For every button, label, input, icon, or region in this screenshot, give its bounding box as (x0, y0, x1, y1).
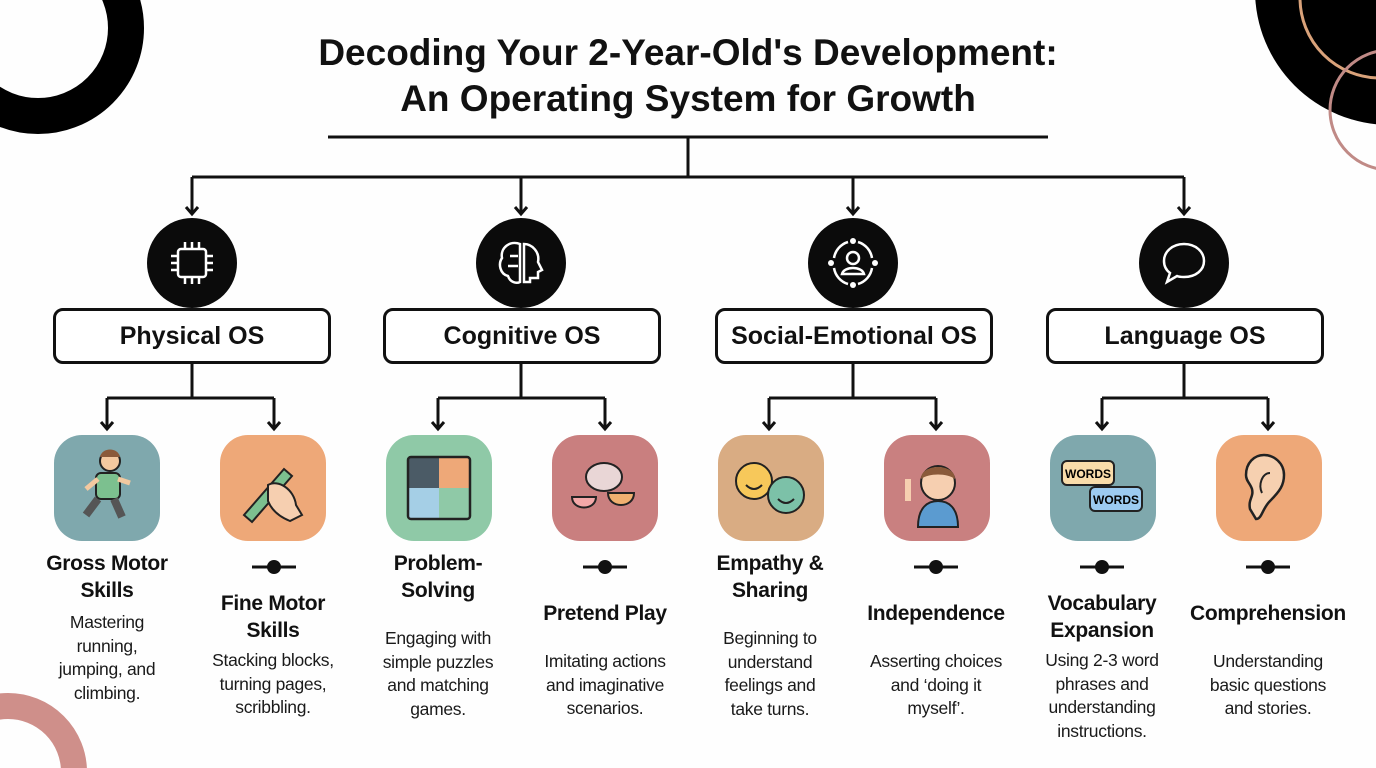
icon: speech bubble (1139, 218, 1229, 308)
card: words: WORDS (1065, 467, 1111, 481)
text: problem solving: Solving (401, 579, 475, 602)
box: Social-Emotional OS (715, 308, 993, 364)
text: independence: myself’. (907, 698, 965, 718)
text: independence: Independence (867, 602, 1005, 625)
text: comprehension (1190, 602, 1346, 718)
text: fine motor (212, 592, 334, 717)
text: problem solving: Problem- (394, 552, 482, 575)
text: empathy: understand (728, 652, 812, 672)
card: ear (1216, 435, 1322, 541)
text: gross motor: Mastering (70, 612, 144, 632)
text: vocabulary: Using 2-3 word (1045, 650, 1159, 670)
text: empathy: Empathy & (716, 552, 824, 575)
box: Physical OS (53, 308, 331, 364)
text: gross motor: climbing. (74, 682, 140, 702)
text: pretend play (543, 602, 667, 718)
text: vocabulary: understanding (1048, 697, 1156, 717)
text: fine motor: Fine Motor (221, 592, 325, 615)
text: gross motor: jumping, and (59, 659, 155, 679)
text: comprehension: basic questions (1210, 674, 1326, 694)
text: gross motor: Gross Motor (46, 552, 168, 575)
text: vocabulary: Vocabulary (1048, 592, 1156, 615)
text: pretend play: scenarios. (567, 698, 643, 718)
card: puzzle (386, 435, 492, 541)
card: fine motor (220, 435, 326, 541)
card: tea set (552, 435, 658, 541)
text: fine motor: turning pages, (220, 674, 326, 694)
text: comprehension: and stories. (1225, 698, 1311, 718)
text: problem solving (383, 552, 493, 718)
title: An Operating System for Growth (400, 78, 976, 119)
text: fine motor: Skills (246, 619, 300, 642)
icon: brain (476, 218, 566, 308)
box: Social-Emotional OS: Social-Emotional OS (731, 322, 977, 350)
text: fine motor: scribbling. (235, 697, 311, 717)
text: vocabulary: Expansion (1050, 619, 1154, 642)
card: empathy (718, 435, 824, 541)
box: Cognitive OS: Cognitive OS (444, 322, 600, 350)
text: gross motor: Skills (80, 579, 134, 602)
title: Decoding Your 2-Year-Old's Development: (318, 32, 1058, 73)
text: empathy: Beginning to (723, 628, 817, 648)
text: comprehension: Comprehension (1190, 602, 1346, 625)
text: pretend play: and imaginative (546, 674, 664, 694)
text: problem solving: Engaging with (385, 628, 491, 648)
card: words: WORDS (1093, 493, 1139, 507)
text: gross motor (46, 552, 168, 702)
text: problem solving: and matching (387, 675, 489, 695)
icon: chip (147, 218, 237, 308)
text: gross motor: running, (77, 636, 137, 656)
text: vocabulary: instructions. (1057, 720, 1147, 740)
text: problem solving: simple puzzles (383, 652, 493, 672)
text: empathy (716, 552, 824, 718)
box: Cognitive OS (383, 308, 661, 364)
text: vocabulary: phrases and (1055, 674, 1149, 694)
text: empathy: feelings and (725, 675, 815, 695)
text: independence: and ‘doing it (891, 674, 981, 694)
text: fine motor: Stacking blocks, (212, 650, 334, 670)
text: pretend play: Imitating actions (544, 651, 666, 671)
text: pretend play: Pretend Play (543, 602, 667, 625)
text: vocabulary (1045, 592, 1159, 740)
text: problem solving: games. (410, 698, 466, 718)
box: Language OS: Language OS (1104, 322, 1266, 350)
text: empathy: Sharing (732, 579, 808, 602)
text: empathy: take turns. (731, 698, 809, 718)
box: Physical OS: Physical OS (120, 322, 264, 350)
title (318, 32, 1058, 119)
decor: top-right circles (1255, 0, 1376, 170)
card: independence (884, 435, 990, 541)
decor: top-left ring (0, 0, 144, 134)
text: independence (867, 602, 1005, 718)
text: comprehension: Understanding (1213, 651, 1323, 671)
decor: bottom-left ring (0, 693, 87, 768)
box: Language OS (1046, 308, 1324, 364)
card: gross motor (54, 435, 160, 541)
icon: social (808, 218, 898, 308)
card: words (1050, 435, 1156, 541)
text: independence: Asserting choices (870, 651, 1002, 671)
